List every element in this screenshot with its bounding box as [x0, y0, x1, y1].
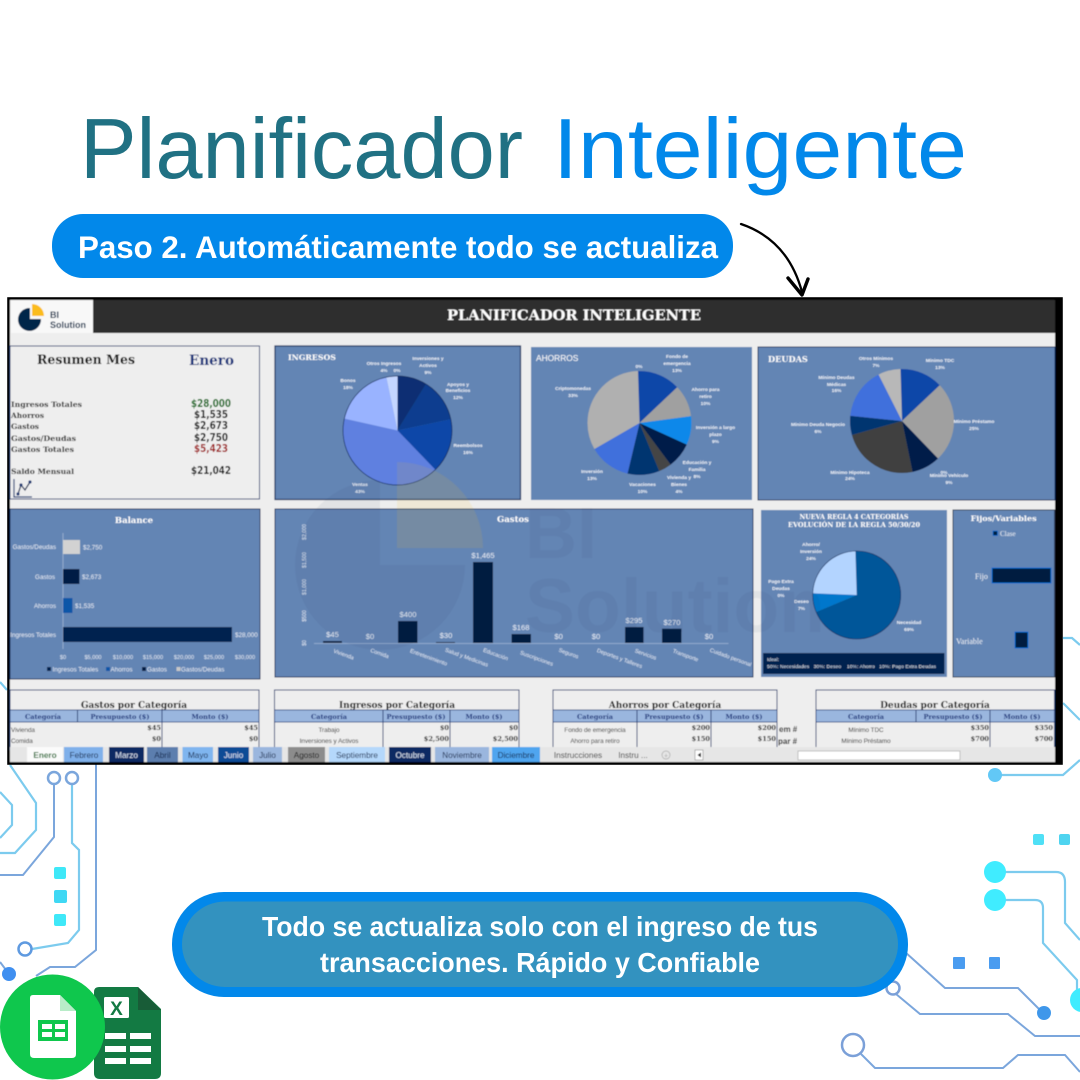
callout pill: transacciones. Rápido y Confiable [320, 947, 760, 978]
panel: ingresos pie: Ventas [352, 482, 368, 488]
panel: deudas pie: Médicas [827, 382, 846, 388]
panel: gastos column chart: Gastos [497, 515, 529, 525]
panel: ahorros pie: Bienes [671, 482, 687, 488]
panel: deudas pie: 9% [945, 480, 953, 486]
panel: ingresos pie: INGRESOS [288, 353, 336, 362]
sheet tabs bar: Abril [154, 751, 171, 760]
y axis labels: $0 [302, 640, 308, 646]
callout pill [172, 892, 908, 997]
table: ingresos por categoría: $0 [440, 724, 449, 732]
table: deudas por categoría: $350 [1035, 724, 1053, 732]
panel: ahorros pie: AHORROS [536, 353, 579, 363]
panel: resumen mes: $2,750 [194, 431, 228, 444]
title [80, 102, 967, 197]
table: gastos por categoría: $0 [249, 735, 258, 743]
panel: ingresos pie: Inversiones y [412, 356, 444, 362]
panel: deudas pie: Mínimo Deudas [818, 375, 855, 381]
legend: Ingresos Totales [52, 666, 98, 674]
panel: gastos column chart: Servicios [634, 648, 657, 662]
panel: balance bar chart: Ahorros [34, 603, 56, 610]
panel: deudas pie: Mínimo Préstamo [954, 419, 994, 425]
table: ahorros por categoría: Fondo de emergencia [564, 727, 626, 734]
panel: balance bar chart: $10,000 [113, 655, 133, 661]
dashboard screenshot [7, 297, 1063, 765]
panel: gastos column chart: $0 [554, 632, 563, 641]
watermark: BI Solution logo: Solution [525, 564, 825, 649]
panel: resumen mes: $5,423 [194, 442, 228, 455]
panel: nueva regla pie: 7% [798, 606, 806, 612]
panel: ahorros pie: Vivienda y [667, 475, 691, 481]
panel: fijos / variables: Clase [1000, 530, 1016, 538]
panel: ahorros pie: 4% [675, 489, 683, 495]
panel: ahorros pie [531, 347, 752, 500]
step pill heading: Paso 2. Automáticamente todo se actualiza [78, 229, 718, 265]
panel: gastos column chart: $0 [592, 632, 600, 641]
table: ahorros por categoría: Monto ($) [725, 713, 763, 721]
panel: balance bar chart: $1,535 [75, 603, 95, 610]
panel: ahorros pie: 0% [635, 364, 643, 370]
panel: gastos column chart: $0 [705, 632, 713, 641]
panel: deudas pie: 0% [940, 470, 948, 476]
table: ingresos por categoría: $2,500 [424, 735, 449, 743]
y axis labels [302, 524, 308, 646]
circuit decoration: right [842, 638, 1080, 1072]
panel: balance bar chart: Gastos/Deudas [13, 544, 56, 551]
panel: resumen mes: Ingresos Totales [11, 400, 82, 409]
table: deudas por categoría: Categoría [848, 713, 885, 721]
table: ingresos por categoría [274, 690, 519, 750]
y axis labels: $1,500 [302, 552, 308, 568]
panel: ingresos pie: 12% [453, 395, 464, 401]
panel: ingresos pie: Apoyos y [447, 382, 469, 388]
sheet tabs bar: Junio [224, 751, 244, 760]
panel: resumen mes: Resumen Mes [37, 353, 135, 368]
panel: balance bar chart: $2,750 [83, 544, 103, 552]
panel: resumen mes: Ahorros [10, 411, 44, 420]
panel: ingresos pie: Beneficios [446, 388, 471, 394]
panel: fijos / variables: Variable [956, 637, 983, 646]
panel: balance bar chart [10, 509, 260, 679]
panel: gastos column chart: Vivienda [332, 649, 355, 662]
legend: Gastos [147, 666, 167, 674]
legend [47, 666, 224, 674]
panel: resumen mes: Gastos/Deudas [11, 434, 76, 443]
title: Inteligente [553, 102, 967, 197]
panel: nueva regla pie: 24% [806, 556, 817, 562]
table: ahorros por categoría: $200 [692, 724, 710, 732]
panel: deudas pie: 16% [832, 388, 842, 394]
table: ingresos por categoría: Categoría [311, 713, 348, 721]
panel: resumen mes: Saldo Mensual [11, 467, 74, 476]
table: gastos por categoría: $0 [152, 735, 161, 743]
panel: balance bar chart: Gastos [35, 574, 55, 581]
table: gastos por categoría: Presupuesto ($) [90, 713, 150, 721]
sheet tabs bar: Febrero [70, 751, 99, 760]
panel: deudas pie: 13% [935, 365, 946, 371]
circuit decoration: left [0, 682, 96, 981]
panel: resumen mes: $28,000 [191, 397, 231, 410]
panel: ahorros pie: emergencia [663, 361, 691, 367]
table: ingresos por categoría: $2,500 [493, 735, 518, 743]
icon: excel [94, 987, 161, 1079]
table: gastos por categoría [10, 690, 259, 750]
panel: balance bar chart: $25,000 [204, 655, 224, 661]
panel: ahorros pie: 33% [568, 393, 579, 399]
sheet tabs bar: Marzo [115, 751, 138, 760]
table: gastos por categoría: Monto ($) [191, 713, 229, 721]
table: deudas por categoría: Mínimo Préstamo [841, 738, 891, 745]
panel: balance bar chart: $15,000 [143, 655, 163, 661]
logo: BI Solution: BI [50, 310, 59, 320]
panel: ahorros pie: Inversión a largo [696, 425, 735, 431]
panel: ingresos pie: Bonos [340, 378, 356, 384]
panel: nueva regla pie [761, 510, 947, 677]
table: ahorros por categoría: $200 [758, 724, 776, 732]
panel: gastos column chart: Seguros [558, 648, 579, 661]
panel: deudas pie: Mínimo Vehículo [930, 473, 968, 479]
sheet tabs bar: Diciembre [498, 751, 535, 760]
panel: balance bar chart: $20,000 [174, 655, 194, 661]
panel: gastos column chart: $295 [626, 616, 642, 625]
panel: nueva regla pie: NUEVA REGLA 4 CATEGORÍAS [800, 514, 909, 521]
table: ahorros por categoría: Ahorros por Categoría [608, 700, 721, 711]
panel: balance bar chart: $0 [60, 655, 66, 661]
panel: deudas pie: 6% [814, 429, 822, 435]
panel: resumen mes: Gastos [11, 422, 39, 431]
sheet tabs bar [10, 747, 1063, 765]
sheet tabs bar: Enero [33, 751, 57, 760]
panel: gastos column chart: $45 [326, 630, 339, 639]
panel: gastos column chart: $0 [366, 632, 374, 641]
table: deudas por categoría: Presupuesto ($) [923, 713, 983, 721]
panel: balance bar chart: $28,000 [235, 632, 258, 639]
y axis labels: $500 [302, 610, 308, 622]
panel: ingresos pie: 9% [424, 370, 432, 376]
panel: ahorros pie: 10% [701, 401, 711, 407]
table: gastos por categoría: $45 [244, 724, 258, 732]
sheet tabs bar: Agosto [294, 751, 320, 760]
watermark: BI Solution logo [295, 480, 825, 650]
panel: ingresos pie: 43% [355, 489, 366, 495]
panel: ahorros pie: Educación y [683, 460, 712, 466]
table: ahorros por categoría: Presupuesto ($) [644, 713, 704, 721]
panel: ahorros pie: Criptomonedas [555, 386, 591, 392]
sheet tabs bar: Instrucciones [554, 751, 602, 760]
icon: line chart [14, 479, 32, 497]
cut-off cell text [778, 725, 798, 746]
panel: nueva regla pie: Deudas [772, 586, 790, 592]
ideal note: 50%: Necesidades 30%: Deseo 10%: Ahorro 10%: Pago Extra Deudas [767, 664, 937, 670]
panel: deudas pie [758, 347, 1055, 500]
panel: gastos column chart: $270 [664, 618, 680, 627]
panel: resumen mes: $21,042 [191, 464, 231, 477]
header bar: PLANIFICADOR INTELIGENTE [447, 308, 701, 324]
panel: fijos / variables [953, 510, 1055, 677]
panel: gastos column chart: $168 [513, 623, 529, 632]
panel: balance bar chart: $2,673 [82, 574, 102, 581]
panel: balance bar chart: $5,000 [84, 655, 102, 661]
table: deudas por categoría: Deudas por Categoría [880, 700, 990, 711]
y axis labels: $2,000 [302, 524, 308, 540]
panel: nueva regla pie: Ahorro/ [802, 542, 820, 548]
table: deudas por categoría: $700 [1035, 735, 1053, 743]
table: ahorros por categoría: Ahorro para retiro [570, 738, 620, 745]
watermark: BI Solution logo: BI [525, 494, 597, 574]
panel: gastos column chart: Deportes y Talleres [596, 648, 643, 670]
legend: Ahorros [110, 666, 133, 674]
legend: Gastos/Deudas [181, 666, 224, 674]
logo: BI Solution: Solution [50, 320, 86, 330]
panel: balance bar chart: $30,000 [235, 655, 255, 661]
panel: ingresos pie: Reembolsos [453, 443, 483, 449]
table: ingresos por categoría: Inversiones y Activos [300, 738, 358, 745]
table: ahorros por categoría: Categoría [577, 713, 614, 721]
logo: BI Solution [11, 300, 93, 333]
panel: ahorros pie: Familia [689, 467, 706, 473]
panel: gastos column chart: $400 [400, 610, 416, 619]
panel: deudas pie: 7% [872, 363, 880, 369]
table: gastos por categoría: Categoría [25, 713, 62, 721]
panel: deudas pie: Mínimo Hipoteca [830, 470, 870, 476]
panel: deudas pie: Otros Mínimos [859, 356, 893, 362]
panel: gastos column chart: Cuidado personal [709, 648, 752, 668]
table: gastos por categoría: Vivienda [11, 727, 36, 734]
panel: gastos column chart [275, 509, 753, 677]
panel: fijos / variables: Fijo [975, 572, 988, 581]
panel: nueva regla pie: Pago Extra [768, 579, 794, 585]
panel: ahorros pie: 8% [693, 474, 701, 480]
step pill heading [52, 214, 733, 278]
table: ingresos por categoría: Monto ($) [465, 713, 503, 721]
panel: gastos column chart: Entretenimiento [409, 649, 448, 668]
panel: balance bar chart: Balance [115, 516, 154, 526]
panel: gastos column chart: Transporte [672, 649, 699, 663]
sheet tabs bar: + [664, 753, 668, 760]
arrow [741, 224, 808, 295]
panel: nueva regla pie: Necesidad [897, 620, 921, 626]
panel: deudas pie: Mínimo TDC [926, 358, 955, 364]
table: gastos por categoría: Gastos por Categoría [81, 700, 187, 711]
panel: gastos column chart: $30 [440, 631, 452, 640]
cut-off cell text: par # [778, 737, 798, 746]
table: deudas por categoría: Mínimo TDC [848, 727, 884, 734]
panel: deudas pie: DEUDAS [768, 354, 808, 364]
panel: nueva regla pie: Inversión [800, 549, 822, 555]
table: gastos por categoría: $45 [147, 724, 161, 732]
table: ingresos por categoría: Ingresos por Categoría [339, 700, 455, 711]
sheet tabs bar: Noviembre [442, 751, 482, 760]
panel: ingresos pie: 0% [393, 368, 401, 374]
table: ingresos por categoría: Trabajo [318, 727, 340, 734]
table: ahorros por categoría: $150 [692, 735, 710, 743]
panel: resumen mes: $1,535 [194, 408, 228, 421]
title: Planificador [80, 102, 523, 197]
cut-off cell text: em # [779, 725, 798, 734]
panel: resumen mes [10, 346, 260, 499]
watermark: yellow quarter [397, 462, 483, 548]
table: ahorros por categoría [553, 690, 777, 750]
callout pill: Todo se actualiza solo con el ingreso de tus [262, 911, 818, 942]
table: ahorros por categoría: $150 [758, 735, 776, 743]
panel: nueva regla pie: EVOLUCIÓN DE LA REGLA 50/30/20 [788, 521, 921, 529]
panel: ahorros pie: 13% [587, 476, 598, 482]
panel: ahorros pie: plazo [709, 432, 722, 438]
panel: deudas pie: 24% [845, 476, 856, 482]
table: deudas por categoría [816, 690, 1054, 750]
y axis labels: $1,000 [302, 579, 308, 595]
table: deudas por categoría: $350 [971, 724, 989, 732]
panel: ahorros pie: retiro [699, 394, 712, 400]
table: ingresos por categoría: $0 [509, 724, 518, 732]
panel: ahorros pie: 9% [712, 439, 720, 445]
sheet tabs bar: Mayo [188, 751, 208, 760]
panel: deudas pie: Mínimo Deuda Negocio [791, 422, 845, 428]
table: deudas por categoría: $700 [971, 735, 989, 743]
panel: gastos column chart: Suscripciones [519, 650, 554, 668]
panel: fijos / variables: Fijos/Variables [971, 514, 1037, 523]
table: deudas por categoría: Monto ($) [1003, 713, 1041, 721]
sheet tabs bar: Septiembre [336, 751, 378, 760]
panel: ingresos pie: 4% [380, 368, 388, 374]
panel: ingresos pie [275, 346, 520, 500]
panel: nueva regla pie: 0% [777, 593, 785, 599]
panel: ahorros pie: Fondo de [666, 354, 688, 360]
panel: ingresos pie: 18% [343, 385, 354, 391]
panel: ingresos pie: Otros Ingresos [367, 361, 402, 367]
panel: ahorros pie: 10% [638, 489, 648, 495]
sheet tabs bar: Instru ... [618, 751, 648, 760]
panel: ahorros pie: Inversión [581, 469, 603, 475]
panel: resumen mes: Gastos Totales [11, 445, 74, 454]
panel: ingresos pie: Activos [419, 363, 437, 369]
panel: gastos column chart: Salud y Medicinas [444, 647, 489, 669]
panel: resumen mes: $2,673 [194, 419, 228, 432]
panel: ingresos pie: 16% [463, 450, 474, 456]
ideal note [763, 653, 944, 674]
icon: google sheets [0, 974, 105, 1080]
panel: resumen mes: Enero [189, 353, 234, 369]
panel: gastos column chart: Educación [482, 648, 509, 662]
panel: gastos column chart: Comida [369, 648, 390, 660]
panel: nueva regla pie: Deseo [794, 599, 809, 605]
ideal note: Ideal: [767, 657, 779, 663]
table: gastos por categoría: Comida [11, 738, 33, 745]
icon: excel: X [110, 999, 123, 1020]
sheet tabs bar: Octubre [395, 751, 425, 760]
panel: deudas pie: 25% [969, 426, 980, 432]
table: ingresos por categoría: Presupuesto ($) [386, 713, 446, 721]
panel: balance bar chart: Ingresos Totales [10, 632, 56, 639]
sheet tabs bar: Julio [259, 751, 276, 760]
panel: nueva regla pie: 69% [904, 627, 915, 633]
panel: ahorros pie: 13% [672, 368, 683, 374]
header bar [93, 300, 1055, 333]
panel: gastos column chart: $1,465 [471, 551, 495, 560]
panel: ahorros pie: Ahorro para [692, 387, 720, 393]
panel: ahorros pie: Vacaciones [629, 482, 656, 488]
